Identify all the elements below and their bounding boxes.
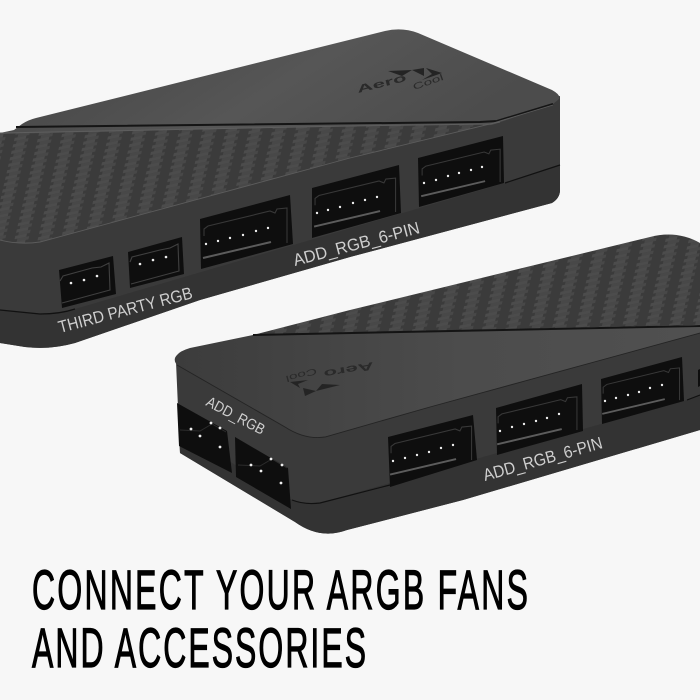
- port: 6-pin 1: [200, 195, 293, 269]
- label: ADD_RGB_6-PIN lower: ADD_RGB_6-PIN: [481, 433, 605, 485]
- device: lower hub: [175, 235, 700, 534]
- lower hub lower shell: [179, 395, 700, 534]
- title: AND ACCESSORIES: [32, 617, 366, 679]
- upper hub lower shell: [0, 165, 560, 348]
- lower hub body side: [176, 330, 700, 534]
- upper hub split line: [16, 104, 553, 127]
- port: cropped edge: [698, 369, 700, 387]
- lower hub seam: [292, 395, 700, 504]
- lower hub front highlight: [177, 333, 700, 438]
- upper hub body side: [0, 96, 560, 348]
- port: third party RGB 1: [59, 256, 116, 308]
- port: ADD_RGB 1: [177, 403, 232, 473]
- logo: AeroCool lower: [285, 360, 375, 396]
- upper hub front lip highlight: [0, 105, 553, 243]
- logo: AeroCool upper: Aero: [356, 71, 408, 95]
- lower hub smooth top face: [175, 326, 700, 438]
- logo: AeroCool lower: Cool: [285, 366, 318, 383]
- lip below split: [0, 122, 500, 133]
- port: lower 6-pin 2: [496, 384, 583, 455]
- port: 6-pin 3: [418, 136, 504, 207]
- port: 6-pin 2: [312, 165, 401, 238]
- upper hub carbon fibre face: [0, 124, 490, 243]
- port: ADD_RGB 2: [235, 437, 291, 509]
- logo: AeroCool upper: [356, 68, 445, 95]
- label: third party RGB: THIRD PARTY RGB: [56, 283, 194, 337]
- upper hub smooth top face: [0, 29, 559, 137]
- lower hub split line: [253, 326, 700, 335]
- upper hub seam: [0, 165, 560, 314]
- lower hub carbon fibre face: [253, 235, 700, 335]
- port: lower 6-pin 3: [601, 357, 684, 424]
- device: upper hub: [0, 29, 560, 348]
- title: [32, 559, 528, 679]
- port: third party RGB 2: [128, 237, 184, 288]
- logo: AeroCool upper: Cool: [412, 73, 445, 92]
- port: lower 6-pin 1: [388, 415, 477, 487]
- label: ADD_RGB_6-PIN upper: ADD_RGB_6-PIN: [291, 218, 422, 270]
- label: ADD_RGB: ADD_RGB: [203, 394, 268, 439]
- logo: AeroCool lower: Aero: [323, 360, 375, 381]
- title: CONNECT YOUR ARGB FANS: [32, 559, 528, 621]
